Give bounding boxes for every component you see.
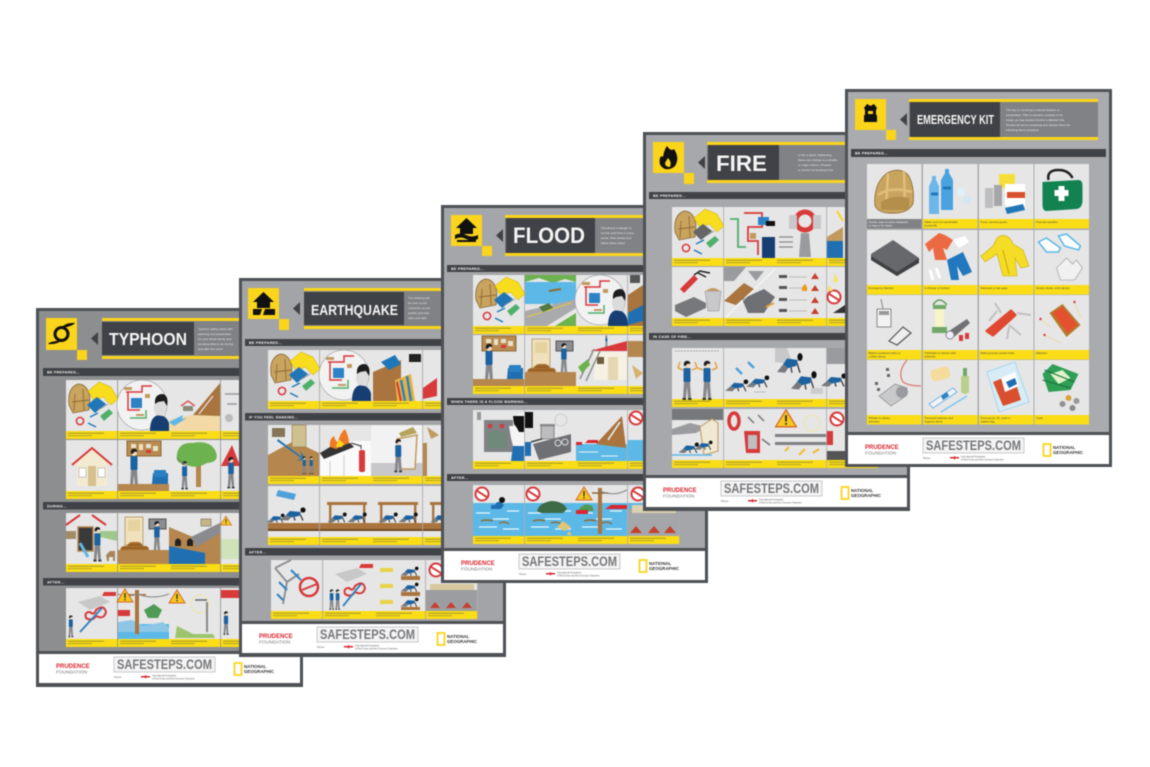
tile: exit route bbox=[724, 207, 775, 266]
poster: fire bbox=[643, 132, 910, 511]
section bar: during: DURING... bbox=[47, 504, 67, 508]
tile: roof repair bbox=[576, 335, 627, 394]
tile: crawl low bbox=[724, 348, 775, 407]
footer: earthquake bbox=[259, 627, 478, 650]
tile: lantern and flashlight: Flashlight or lantern with bbox=[924, 351, 956, 355]
tile: river bank bbox=[576, 410, 627, 469]
tile: debris bbox=[221, 588, 272, 647]
tile: landslide bbox=[169, 380, 220, 439]
header: earthquake: calm and safe bbox=[408, 316, 427, 320]
tile: cash bbox=[1034, 360, 1089, 424]
tile: go bag bbox=[672, 207, 724, 266]
tile: check door bbox=[724, 409, 775, 468]
tile: first aid: First aid supplies bbox=[1036, 220, 1058, 224]
tile: radio bbox=[867, 295, 922, 360]
header: emergency kit: following items prepared. bbox=[1006, 128, 1040, 132]
tile: smoke and crawl bbox=[821, 348, 878, 407]
poster: flood bbox=[441, 205, 708, 583]
tile: documents bbox=[979, 360, 1034, 424]
tile: under table three bbox=[423, 486, 474, 545]
footer: earthquake: Partner bbox=[317, 646, 325, 649]
tile: lantern and flashlight bbox=[923, 295, 978, 360]
header: earthquake: moments, so act bbox=[408, 306, 430, 310]
footer: fire: International Federation bbox=[759, 498, 784, 502]
footer: flood: International Federation bbox=[557, 572, 582, 574]
tile: route check bbox=[323, 560, 374, 619]
section bar: be prepared bbox=[447, 265, 702, 272]
tile: no water on oil fire bbox=[827, 267, 878, 326]
tile: cover with smoke above bbox=[672, 409, 723, 468]
section bar: during bbox=[43, 502, 297, 510]
footer: emergency kit: SAFESTEPS.COM bbox=[926, 438, 1021, 453]
footer: fire: Partner bbox=[721, 500, 729, 503]
tile: raincoat bbox=[979, 230, 1034, 294]
footer: typhoon: PRUDENCE bbox=[56, 664, 90, 670]
header: typhoon: Typhoon safety starts with bbox=[198, 327, 233, 331]
tile: sandbags bbox=[525, 335, 576, 394]
footer: typhoon: GEOGRAPHIC bbox=[244, 669, 275, 674]
footer: fire bbox=[663, 481, 882, 504]
tile: shoes and gloves: Sturdy shoes, work gloves bbox=[1036, 286, 1070, 290]
footer: typhoon: SAFESTEPS.COM bbox=[117, 657, 212, 672]
tile: blanket: Emergency blanket bbox=[868, 286, 893, 290]
tile: matches bbox=[1034, 295, 1089, 360]
footer: earthquake: GEOGRAPHIC bbox=[447, 639, 478, 644]
tile: no crossing bbox=[628, 410, 679, 469]
tile: hygiene bbox=[923, 360, 978, 424]
header: typhoon: and after the storm bbox=[198, 347, 224, 351]
tile: pocket knife bbox=[979, 295, 1034, 360]
tile: fallen power pole bbox=[117, 588, 169, 647]
tile: move valuables bbox=[525, 410, 576, 469]
tile: food: Food, canned goods bbox=[980, 220, 1007, 224]
header: emergency kit: preparation. Plan to prepare, prepare to be bbox=[1006, 113, 1063, 117]
tile: water: foodstuffs bbox=[924, 224, 938, 228]
section bar: be prepared bbox=[649, 192, 904, 199]
tile: clothes bbox=[923, 230, 978, 294]
tile: move away from shelves bbox=[268, 425, 319, 484]
section bar: after bbox=[447, 474, 702, 481]
footer: emergency kit: Partner bbox=[923, 457, 931, 460]
footer: flood: GEOGRAPHIC bbox=[649, 566, 680, 571]
tile: whistle bbox=[867, 360, 922, 424]
footer: flood: Partner bbox=[519, 573, 527, 576]
section bar: in case of fire: IN CASE OF FIRE... bbox=[653, 335, 691, 339]
section bar: if you feel shaking bbox=[245, 413, 500, 420]
header: earthquake: The shaking will bbox=[408, 296, 430, 300]
footer: earthquake: FOUNDATION bbox=[259, 640, 291, 646]
section bar: after bbox=[43, 578, 297, 586]
footer: emergency kit: International Federation bbox=[961, 456, 986, 458]
tile: shoes and gloves bbox=[1034, 230, 1089, 294]
header: flood: follow these steps bbox=[601, 241, 625, 245]
footer: emergency kit: FOUNDATION bbox=[865, 450, 897, 456]
tile: drop under cover bbox=[267, 486, 319, 545]
header: fire bbox=[653, 142, 899, 184]
tile: run crouched bbox=[775, 348, 826, 407]
tile: whistle: Whistle to attract bbox=[868, 416, 890, 420]
tile: warning gas leak bbox=[775, 409, 826, 468]
tile: blanket bbox=[867, 230, 922, 294]
tile: turn off appliances bbox=[724, 267, 775, 326]
tile: house bbox=[66, 440, 117, 499]
tile: evacuation plan bbox=[117, 380, 170, 439]
header: earthquake: EARTHQUAKE bbox=[311, 303, 398, 319]
header: typhoon: for your whole family and bbox=[198, 337, 232, 341]
footer: typhoon bbox=[56, 657, 275, 680]
footer: typhoon: Partner bbox=[114, 676, 122, 679]
tile: stay home with pet bbox=[66, 513, 117, 572]
header: typhoon: TYPHOON bbox=[109, 329, 187, 349]
tile: emergency board bbox=[473, 335, 524, 394]
tile: hygiene: hygiene items bbox=[924, 420, 943, 424]
header: flood: areas. Plan ahead and bbox=[601, 236, 632, 240]
tile: stairs bbox=[628, 275, 679, 334]
footer: flood bbox=[461, 554, 680, 578]
header: emergency kit bbox=[855, 99, 1098, 140]
tile: matches: Matches bbox=[1036, 351, 1047, 355]
section bar: be prepared: BE PREPARED... bbox=[47, 370, 80, 374]
header: flood bbox=[451, 215, 697, 256]
tile: red sofa bbox=[423, 350, 474, 409]
tile: river and road map bbox=[525, 275, 576, 334]
tile: radio: mobile phone bbox=[868, 354, 886, 358]
tile: roof bbox=[221, 440, 272, 499]
header: flood: Flooding is a danger to bbox=[601, 226, 632, 230]
footer: fire: GEOGRAPHIC bbox=[851, 493, 882, 498]
header: typhoon: planning and preparation bbox=[198, 332, 232, 336]
tile: electrical hazard bbox=[169, 588, 220, 647]
footer: fire: PRUDENCE bbox=[663, 488, 697, 494]
tile: first aid bbox=[1034, 164, 1089, 228]
footer: emergency kit bbox=[865, 438, 1084, 462]
footer: fire: of Red Cross and Red Crescent Societies bbox=[759, 502, 802, 504]
header: emergency kit: EMERGENCY KIT bbox=[917, 113, 994, 127]
tile: stand in doorway bbox=[371, 425, 422, 484]
tile: go bag bbox=[268, 350, 320, 409]
header: fire: FIRE bbox=[716, 151, 767, 176]
tile: evacuation plan bbox=[319, 350, 372, 409]
tile: evacuation plan bbox=[575, 275, 628, 334]
footer: flood: of Red Cross and Red Crescent Societies bbox=[557, 574, 600, 578]
tile: water: Water and non-perishable bbox=[924, 220, 958, 224]
footer: earthquake: SAFESTEPS.COM bbox=[320, 627, 415, 642]
tile: food bbox=[979, 164, 1034, 228]
tile: no swimming in floodwater bbox=[473, 485, 524, 544]
footer: earthquake: International Federation bbox=[355, 644, 380, 648]
footer: earthquake: PRUDENCE bbox=[259, 634, 293, 640]
header: earthquake bbox=[248, 288, 494, 330]
header: emergency kit: The key to surviving a natural disaster is bbox=[1006, 108, 1060, 112]
tile: stay calm bbox=[672, 348, 723, 407]
tile: extinguisher types bbox=[775, 267, 826, 326]
section bar: be prepared: BE PREPARED... bbox=[653, 194, 686, 198]
poster: typhoon bbox=[36, 308, 303, 687]
footer: fire: SAFESTEPS.COM bbox=[724, 481, 819, 496]
tile: lantern and flashlight: batteries bbox=[924, 354, 936, 358]
section bar: be prepared bbox=[851, 149, 1106, 157]
tile: no elevator bbox=[271, 560, 322, 619]
footer: emergency kit: of Red Cross and Red Crescent Societies bbox=[961, 458, 1004, 462]
tile: doorway detail bbox=[423, 425, 474, 484]
footer: flood: PRUDENCE bbox=[461, 561, 495, 567]
section bar: after: AFTER... bbox=[451, 476, 468, 480]
footer: emergency kit: GEOGRAPHIC bbox=[1053, 450, 1084, 455]
footer: fire: NATIONAL bbox=[851, 488, 874, 493]
footer: earthquake: of Red Cross and Red Crescent Societies bbox=[355, 648, 398, 650]
section bar: flood warning bbox=[447, 398, 702, 405]
header: earthquake: quickly and stay bbox=[408, 311, 430, 315]
footer: typhoon: International Federation bbox=[152, 674, 177, 678]
header: emergency kit: ready: go bag stocked before a disaster hits. bbox=[1006, 118, 1065, 122]
footer: emergency kit: PRUDENCE bbox=[865, 445, 899, 451]
section bar: if you feel shaking: IF YOU FEEL SHAKING... bbox=[249, 416, 298, 420]
section bar: flood warning: WHEN THERE IS A FLOOD WARNING... bbox=[451, 400, 528, 404]
header: typhoon: knowing what to do during bbox=[198, 342, 233, 346]
tile: documents: sealed bag bbox=[980, 420, 995, 424]
section bar: be prepared: BE PREPARED... bbox=[249, 341, 282, 345]
tile: utilities bbox=[221, 380, 272, 439]
tile: go bag sofa bbox=[827, 207, 878, 266]
tile: under table two bbox=[371, 486, 422, 545]
tile: boxes bbox=[628, 335, 679, 394]
section bar: be prepared: BE PREPARED... bbox=[855, 152, 888, 156]
tile: water bbox=[923, 164, 978, 228]
tile: hygiene: Personal toiletries and bbox=[924, 416, 953, 420]
footer: flood: FOUNDATION bbox=[461, 566, 493, 572]
footer: emergency kit: NATIONAL bbox=[1053, 445, 1076, 450]
tile: go bag bbox=[473, 275, 525, 334]
tile: smoke alarm bbox=[775, 207, 826, 266]
header: earthquake: be over in just bbox=[408, 301, 427, 305]
tile: drill steps bbox=[374, 560, 425, 619]
tile: secure furniture bbox=[371, 350, 422, 409]
footer: typhoon: FOUNDATION bbox=[56, 670, 88, 676]
section bar: in case of fire bbox=[649, 333, 904, 340]
tile: no entry to damaged house bbox=[426, 560, 477, 619]
tile: documents: Documents, ID, cash in bbox=[980, 416, 1011, 420]
section bar: be prepared bbox=[245, 339, 500, 346]
tile: raincoat: Raincoat or rain gear bbox=[980, 286, 1008, 290]
section bar: be prepared bbox=[43, 368, 297, 376]
footer: typhoon: NATIONAL bbox=[244, 664, 267, 669]
header: fire: In fire a quick, frightening bbox=[798, 153, 832, 157]
tile: no elevator fire bbox=[827, 409, 878, 468]
header: fire: flame can change to a deadly bbox=[798, 158, 838, 162]
section bar: after: AFTER... bbox=[249, 550, 266, 554]
tile: fallen wires bbox=[576, 485, 627, 544]
tile: switch off mains bbox=[473, 410, 524, 469]
tile: pocket knife: Multi-purpose pocket knife bbox=[980, 351, 1015, 355]
header: flood: FLOOD bbox=[513, 223, 585, 248]
tile: trim trees bbox=[169, 440, 220, 499]
header: emergency kit: Review all you're preparing and always have the bbox=[1006, 123, 1071, 127]
poster: emergency kit bbox=[845, 89, 1112, 467]
poster: earthquake bbox=[239, 278, 506, 657]
tile: kitchen fire bbox=[320, 425, 371, 484]
tile: no entry damaged bbox=[628, 485, 679, 544]
tile: backpack: Sturdy, easy-to-carry backpack bbox=[868, 220, 909, 224]
section bar: after bbox=[245, 548, 500, 556]
tile: backpack: or bag to be ready bbox=[868, 224, 893, 228]
tile: sandbags bbox=[118, 513, 169, 572]
footer: flood: NATIONAL bbox=[649, 561, 672, 566]
tile: under table one bbox=[320, 486, 371, 545]
tile: stay indoors on sofa bbox=[169, 513, 220, 572]
section bar: be prepared: BE PREPARED... bbox=[451, 267, 484, 271]
tile: no driving bbox=[525, 485, 576, 544]
tile: route check bbox=[66, 588, 117, 647]
tile: extinguisher and blanket bbox=[672, 267, 723, 326]
footer: typhoon: of Red Cross and Red Crescent Societies bbox=[152, 678, 195, 680]
tile: clothes: A change of clothes bbox=[924, 286, 950, 290]
header: flood: homes and lives in many bbox=[601, 231, 635, 235]
section bar: after: AFTER... bbox=[47, 580, 64, 584]
header: typhoon bbox=[46, 318, 292, 360]
footer: fire: FOUNDATION bbox=[663, 494, 695, 500]
tile: cash: Cash bbox=[1036, 416, 1043, 420]
footer: flood: SAFESTEPS.COM bbox=[522, 554, 617, 569]
tile: go bag bbox=[66, 380, 118, 439]
tile: whistle: attention bbox=[868, 420, 880, 424]
tile: backpack bbox=[867, 164, 922, 228]
tile: emergency board bbox=[118, 440, 169, 499]
header: fire: to survive by knowing how bbox=[798, 168, 834, 172]
tile: radio: Battery-powered radio or bbox=[868, 351, 900, 355]
header: fire: or major inferno. Prepare bbox=[798, 163, 832, 167]
tile: lamp bbox=[220, 513, 272, 572]
footer: earthquake: NATIONAL bbox=[447, 634, 470, 639]
